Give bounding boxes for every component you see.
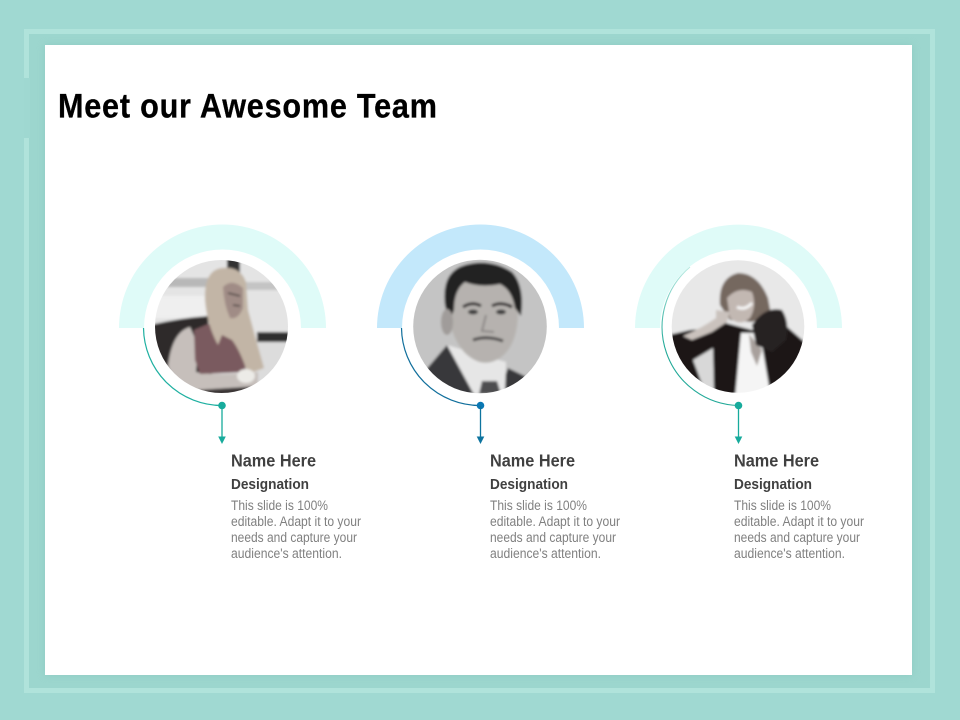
dot 1: [218, 402, 226, 409]
text block 3: This slide is 100%: [734, 498, 831, 513]
text block 3: editable. Adapt it to your: [734, 514, 864, 529]
text block 2: Designation: [490, 477, 568, 493]
arrow 2: [477, 406, 484, 444]
text block 3: Designation: [734, 477, 812, 493]
arrow 3: [735, 406, 742, 444]
half ring 3: [635, 225, 842, 328]
dot 3: [735, 402, 742, 409]
text block 2: [490, 450, 620, 561]
text block 2: This slide is 100%: [490, 498, 587, 513]
half ring 2: [377, 225, 584, 328]
arrow 1: [218, 406, 226, 444]
text block 2: Name Here: [490, 450, 575, 470]
photo 3: woman in black jacket: [672, 260, 804, 393]
text block 1: Name Here: [231, 450, 316, 470]
connector arc 2: [402, 328, 480, 406]
photo 2: man in suit: [413, 260, 547, 394]
text block 3: Name Here: [734, 450, 819, 470]
title: Meet our Awesome Team: [58, 87, 437, 125]
photo 1: woman seated: [155, 260, 288, 393]
text block 2: needs and capture your: [490, 530, 616, 545]
text block 2: editable. Adapt it to your: [490, 514, 620, 529]
text block 1: needs and capture your: [231, 530, 357, 545]
text block 1: This slide is 100%: [231, 498, 328, 513]
text block 1: [231, 450, 361, 561]
white slide panel: [45, 45, 912, 675]
team member 2: [377, 225, 620, 561]
dot 2: [477, 402, 484, 409]
connector arc 3: [662, 267, 738, 406]
text block 1: Designation: [231, 477, 309, 493]
text block 3: audience's attention.: [734, 546, 845, 561]
text block 1: audience's attention.: [231, 546, 342, 561]
half ring 1: [119, 225, 326, 328]
connector arc 1: [144, 328, 222, 406]
team member 1: [119, 225, 361, 561]
text block 3: needs and capture your: [734, 530, 860, 545]
text block 3: [734, 450, 864, 561]
text block 2: audience's attention.: [490, 546, 601, 561]
team member 3: [635, 225, 864, 561]
text block 1: editable. Adapt it to your: [231, 514, 361, 529]
